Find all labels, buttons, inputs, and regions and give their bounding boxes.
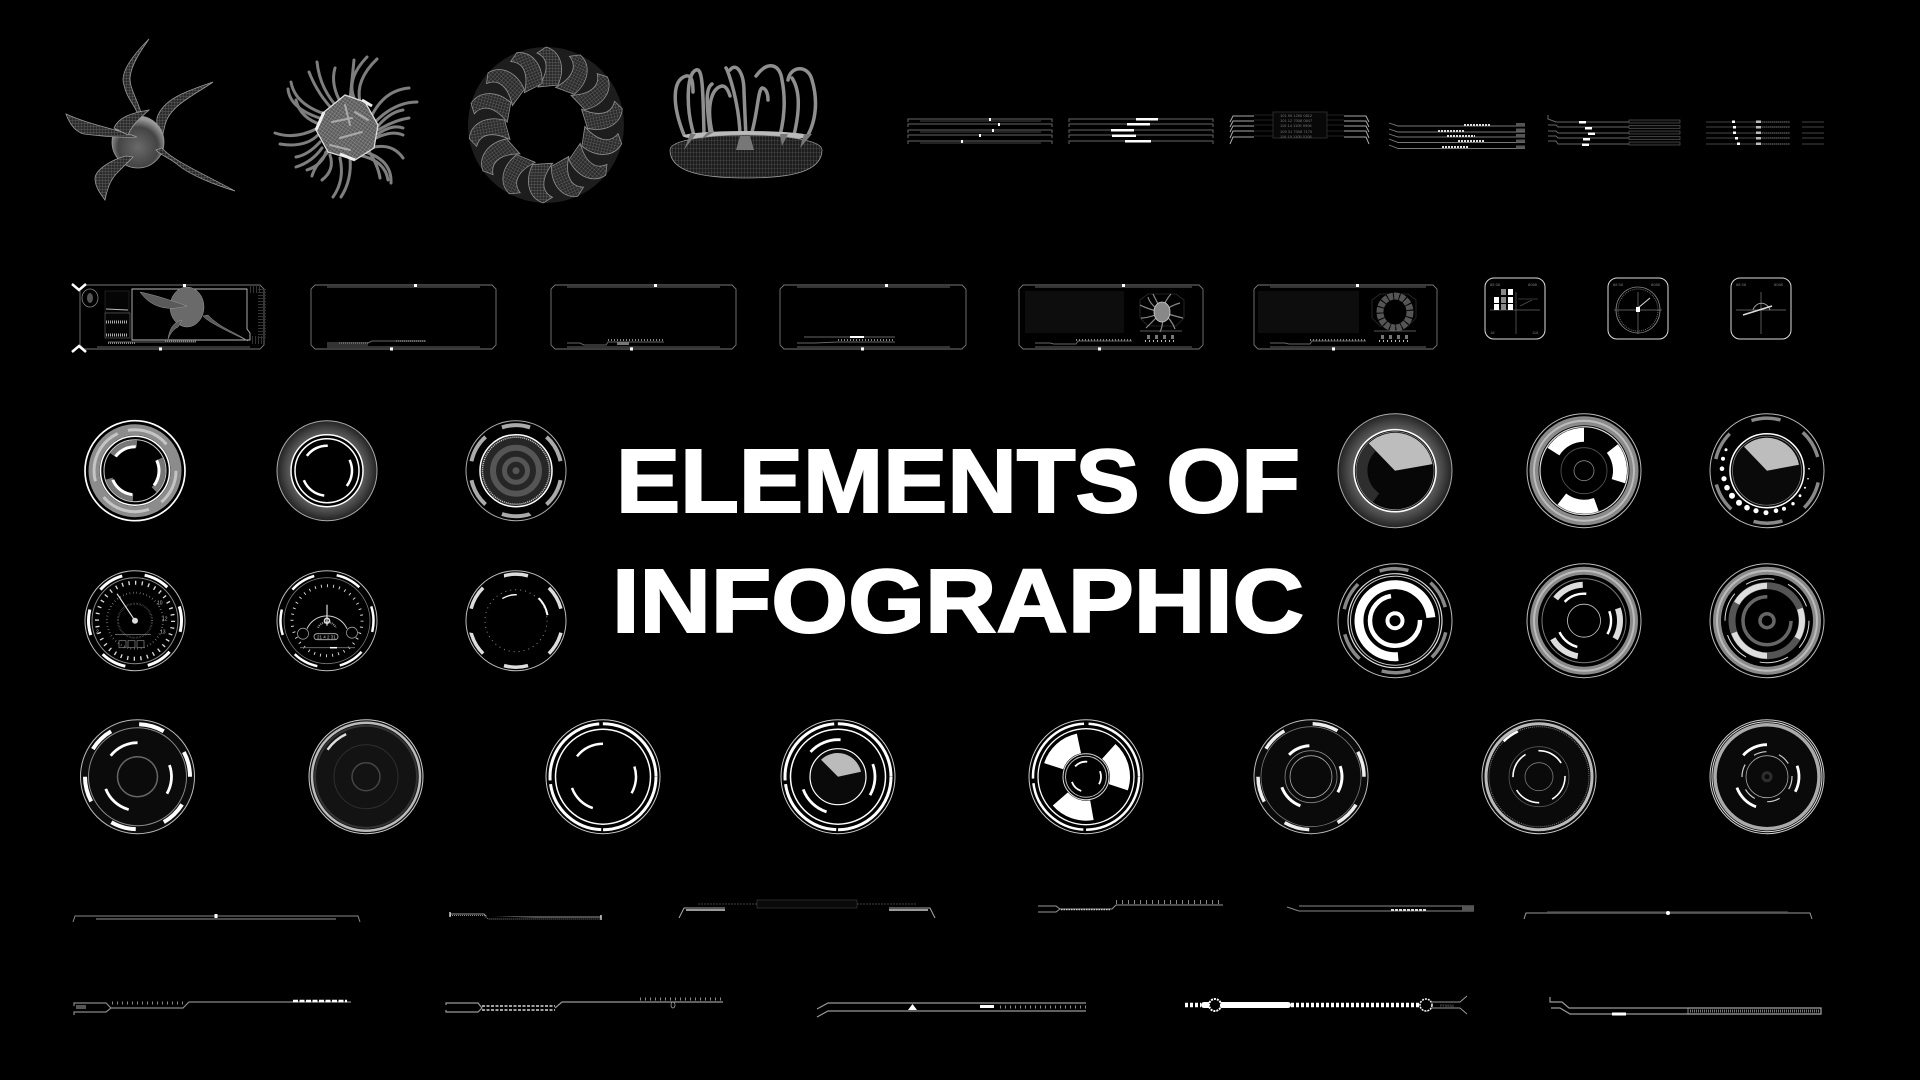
gauge: speedometer: 12 — [162, 617, 168, 623]
gauge row 3: ring 2 — [301, 711, 431, 842]
gauge: dial with readout: 21 4 2 31 — [317, 635, 336, 640]
dots arc — [1720, 448, 1810, 515]
bottom line 9 — [817, 1003, 1086, 1017]
panel 4: frame with ruler and bar — [780, 284, 966, 350]
square radar: crosshair: 8088 — [1774, 282, 1784, 287]
square radar: grid of blocks: 118 — [1532, 330, 1539, 335]
bottom line 4 — [1038, 902, 1223, 912]
square radar: grid of blocks: 18 — [1490, 330, 1495, 335]
panel 6: ring creature monitor — [1254, 284, 1437, 350]
square radar: grid of blocks: 88 58 — [1490, 282, 1501, 287]
HUD line group 4 — [1389, 123, 1525, 148]
gauge: dial with readout — [272, 566, 382, 676]
gauge row 3: ring 6 — [1254, 720, 1368, 834]
HUD line group 6 — [1706, 120, 1824, 145]
bottom line 1 — [73, 914, 360, 922]
gauge row 3: ring 8 — [1710, 720, 1824, 834]
bottom line 3 — [679, 900, 935, 918]
3D wireframe: crown jellyfish — [670, 66, 822, 178]
HUD line group 3: 101 99 1290 0812 — [1280, 113, 1313, 118]
panel 5: spiky creature monitor — [1019, 284, 1203, 350]
square radar: grid of blocks — [1485, 278, 1545, 339]
HUD line group 2 — [1069, 118, 1213, 144]
square radar: crosshair — [1731, 278, 1791, 339]
bottom line 2 — [450, 912, 601, 920]
gauge row 3: ring 1 — [80, 720, 194, 834]
HUD line group 1 — [908, 118, 1052, 144]
panel 3: frame with ruler — [551, 284, 736, 350]
gauge: white sector ring — [1527, 414, 1641, 528]
gauge: ring with grey sectors — [85, 421, 185, 521]
title: INFOGRAPHIC — [612, 552, 1304, 652]
bottom line 11 — [1550, 997, 1821, 1016]
gauge: speedometer: 13 — [160, 630, 166, 636]
gauge: glowing ring — [277, 421, 377, 521]
bottom line 10 — [1185, 996, 1467, 1014]
title: ELEMENTS OF — [616, 432, 1300, 532]
gauge row 3: white sectors — [1029, 720, 1143, 834]
gauge: radar with dots — [1701, 405, 1833, 536]
3D wireframe: spiky creature — [275, 57, 417, 197]
gauge: dotted ring — [459, 564, 573, 678]
bottom line 8 — [446, 999, 723, 1012]
gauge: concentric target — [459, 413, 573, 528]
square radar: compass: 8088 — [1651, 282, 1661, 287]
panel 6 mini ring — [1380, 296, 1410, 328]
gauge: grey and white arcs — [1710, 564, 1824, 678]
gauge: radar with glow — [1338, 414, 1452, 528]
square radar: compass: 88 58 — [1613, 282, 1624, 287]
panel 2: empty frame — [311, 284, 496, 350]
square radar: compass — [1608, 278, 1668, 339]
gauge row 3: ring 7 — [1468, 706, 1610, 847]
bottom line 10: FF0934 — [1440, 1003, 1455, 1008]
gauge: speedometer: 2 — [96, 630, 99, 636]
panel 1 creature crop — [140, 287, 248, 341]
title — [612, 432, 1304, 652]
gauge: bold white rings — [1330, 556, 1460, 686]
gauge: speedometer: 10 — [157, 601, 163, 607]
gauge row 3: ring 3 — [546, 720, 660, 834]
square radar: crosshair: 88 58 — [1736, 282, 1747, 287]
HUD line group 3: 101 12 7008 0647 — [1280, 118, 1313, 123]
HUD line group 5 — [1548, 115, 1680, 146]
panel 1: creature monitor — [72, 284, 264, 352]
HUD line group 3: 109 31 7008 7170 — [1280, 129, 1313, 134]
3D wireframe: fin ring — [466, 47, 626, 203]
HUD line group 3: 116 19 1105 0108 — [1280, 134, 1312, 139]
gauge row 3: ring 4 with radar — [781, 720, 895, 834]
3D wireframe: propeller creature — [66, 39, 235, 200]
HUD line group 3 — [1230, 112, 1369, 144]
bottom line 5 — [1287, 906, 1474, 911]
gauge: broken arcs — [1527, 564, 1641, 678]
bottom line 6 — [1524, 911, 1812, 919]
bottom line 7 — [74, 1001, 351, 1015]
square radar: grid of blocks: 8088 — [1528, 282, 1538, 287]
panel 5 mini creature — [1140, 294, 1183, 332]
gauge: speedometer — [80, 566, 190, 676]
HUD line group 3: 116 14 1105 9906 — [1280, 123, 1312, 128]
